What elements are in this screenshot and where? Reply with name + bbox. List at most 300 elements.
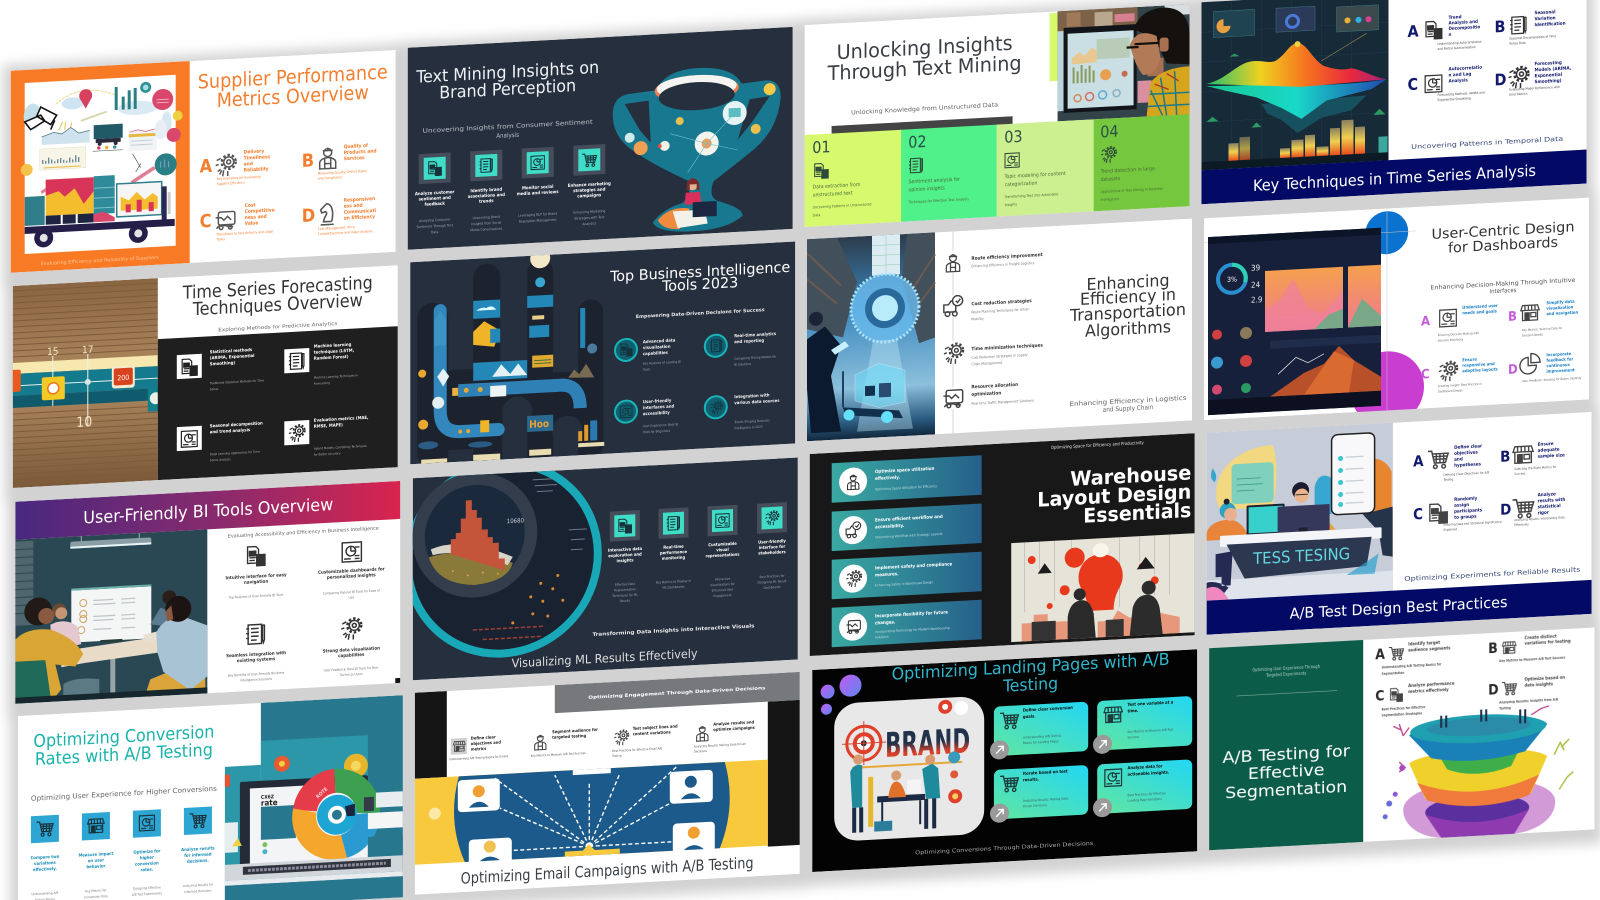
design items A B C D [1421, 298, 1582, 395]
column headings [414, 182, 610, 206]
design items A B C D: feedback for [1546, 356, 1573, 363]
panel: Visualizing ML Results Effectively slide [408, 448, 798, 681]
title: Algorithms [1085, 317, 1171, 341]
title: Warehouse [1070, 460, 1191, 491]
practices A B C D: C [1413, 505, 1423, 524]
practices A B C D: B [1500, 447, 1510, 466]
column headings: Enhance marketing [568, 181, 611, 189]
step boxes 01 to 04 [805, 114, 1190, 227]
techniques A B C D: Models (ARIMA, [1534, 65, 1572, 73]
feature text: Tools for Beginners [643, 429, 671, 434]
orange sidebar [11, 61, 190, 273]
column headings: monitoring [662, 555, 685, 561]
segmentation items A B C D: Best Practices for Effective [1382, 705, 1425, 711]
purple dots [821, 674, 862, 715]
techniques A B C D: Seasonal [1534, 9, 1556, 16]
column headings: strategies and [573, 187, 606, 194]
step boxes 01 to 04: Applications of Text Mining in Business [1101, 187, 1163, 194]
illustration: rainbow time series chart [1202, 0, 1388, 170]
tool features: Comparing Popular BI Tools for Ease of [323, 588, 381, 596]
icons [216, 147, 338, 231]
practices A B C D: to groups [1454, 514, 1477, 521]
illustration: testers at desk with phone [1207, 423, 1393, 601]
title: for Dashboards [1448, 235, 1558, 257]
metrics A B C D: A [200, 156, 213, 177]
title: Rates with A/B Testing [35, 740, 213, 770]
feature text: Key Features of Leading BI [643, 360, 681, 366]
design items A B C D: adaptive layouts [1462, 366, 1498, 373]
title: Visualizing ML Results Effectively [512, 646, 698, 670]
practices A B C D: Randomly [1454, 496, 1478, 503]
panel: Optimizing Landing Pages with A/B Testing slide [812, 648, 1197, 872]
sidebar caption: Targeted Experiments [1265, 671, 1306, 678]
column descriptions: Interactive [715, 577, 730, 581]
list cards: Solutions [875, 635, 889, 639]
panel: A/B Test Design Best Practices slide [1207, 412, 1592, 635]
title [198, 68, 387, 107]
techniques A B C D: Exponential [1534, 72, 1563, 79]
feature text: BI Solutions [734, 362, 752, 367]
step descriptions: A/B Test Experiments [132, 891, 163, 897]
feature text: and reporting [734, 338, 764, 345]
step descriptions: Designing Effective [133, 885, 161, 891]
column descriptions: Visualizations for [710, 582, 736, 587]
title: Optimizing Email Campaigns with A/B Testing [461, 854, 754, 888]
column descriptions [612, 574, 787, 604]
tool features: Customizable dashboards for [318, 566, 385, 576]
title [33, 722, 214, 770]
feature text [643, 331, 780, 435]
practices A B C D: Selecting the Right Metrics for [1514, 465, 1557, 471]
design items A B C D: Ensure [1462, 357, 1477, 362]
title: A/B Test Design Best Practices [1290, 594, 1508, 623]
segmentation items A B C D: Optimize based on [1524, 675, 1565, 683]
title [1037, 460, 1191, 530]
techniques A B C D: Identification [1534, 21, 1566, 28]
list cards: Streamlining Workflow with Strategic Layouts [875, 532, 943, 539]
step descriptions: Informed Decisions [184, 889, 212, 894]
tool features: Technical Users [340, 672, 363, 677]
techniques A B C D: A [1408, 22, 1419, 41]
panel: User-Centric Design for Dashboards slide [1204, 198, 1589, 435]
title: Effective [1248, 760, 1325, 783]
practices A B C D: A [1413, 452, 1424, 471]
column descriptions: Leveraging NLP for Brand [518, 212, 557, 218]
title [892, 650, 1170, 702]
title: Efficiency in [1080, 285, 1176, 309]
feature cards: Driven Decisions [1023, 803, 1047, 808]
panel: Text Mining Insights on Brand Perception slide [408, 27, 793, 250]
design items A B C D: Ensuring Decision-Making with [1438, 331, 1480, 337]
practices A B C D: Analyze [1538, 491, 1556, 498]
feature cards: Basics for Landing Pages [1023, 739, 1059, 745]
tool features: Seamless integration with [226, 650, 286, 659]
design items A B C D: needs and goals [1462, 308, 1498, 315]
design items A B C D: B [1508, 309, 1517, 325]
illustration: dashboard screen: 3% [1227, 276, 1237, 284]
tool features: personalized insights [327, 572, 376, 581]
illustration: dashboard screen: 2.9 [1251, 295, 1263, 305]
step boxes 01 to 04: 02 [908, 132, 926, 152]
steps list: Cost reduction strategies [971, 298, 1032, 307]
techniques A B C D: Evaluating Model Performance with [1509, 85, 1560, 92]
metrics A B C D: Competitiveness and Value Analysis [318, 229, 373, 236]
metrics A B C D: Quality of [344, 143, 368, 150]
four steps: Decisions [694, 749, 707, 754]
title [1222, 741, 1350, 803]
list cards: Optimize space utilization [875, 466, 934, 475]
illustration: dashboard screen [1208, 228, 1381, 415]
techniques A B C D: C [1408, 75, 1418, 94]
illustration: BRAND card: BRAND [885, 721, 970, 766]
subtitle: and Supply Chain [1103, 403, 1154, 414]
step headings [30, 845, 215, 879]
title: Segmentation [1225, 777, 1347, 802]
illustration: BRAND card [834, 696, 984, 842]
dark panel with four methods: techniques (LSTM, [314, 348, 355, 356]
step boxes 01 to 04: 03 [1004, 127, 1022, 147]
column descriptions: Analyzing Consumer [419, 217, 451, 223]
step boxes 01 to 04: datasets [1101, 176, 1121, 183]
title: Time Series Forecasting [182, 273, 373, 304]
design items A B C D: Key Metrics: Tailoring Data for [1522, 326, 1563, 332]
design items A B C D: and navigation [1546, 310, 1578, 316]
dark panel with four methods: Statistical methods [210, 347, 253, 355]
list cards [832, 455, 982, 647]
four steps: Test subject lines and [633, 723, 678, 731]
step headings: decisions. [187, 858, 209, 865]
icons [943, 250, 963, 410]
step boxes 01 to 04: Techniques for Effective Text Analysis [909, 197, 969, 204]
photo: analyst at monitor [1058, 4, 1190, 121]
column descriptions: Results [620, 599, 631, 603]
dark panel with four methods: Smoothing) [210, 360, 235, 367]
metrics A B C D: Cost [245, 202, 256, 209]
tool features: Intuitive interface for easy [226, 572, 287, 581]
column descriptions: ML Dashboards [662, 585, 685, 590]
metrics A B C D: Services [344, 155, 365, 162]
metrics A B C D: Timeliness [244, 154, 271, 162]
practices A B C D: and [1454, 456, 1463, 463]
metrics A B C D: Measuring Quality: Defect Rates [318, 169, 367, 176]
segmentation items A B C D: Identify target [1408, 640, 1440, 648]
column descriptions [416, 209, 605, 235]
feature cards: Key Metrics to Measure A/B Test [1128, 727, 1174, 734]
column headings: User-friendly [758, 538, 786, 545]
title: Techniques Overview [192, 290, 363, 320]
feature text: User Experience: Best BI [643, 422, 678, 428]
step headings: on user [88, 857, 104, 864]
segmentation items A B C D: Testing [1499, 706, 1511, 711]
step boxes 01 to 04: 04 [1100, 122, 1118, 142]
panel: Warehouse Layout Design Essentials slide [810, 433, 1195, 656]
subtitle: Uncovering Insights from Consumer Sentiment [423, 119, 594, 135]
segmentation items A B C D: Analyzing Results: Insights from A/B [1499, 697, 1558, 705]
title: Tools 2023 [661, 275, 738, 295]
column headings: Monitor social [522, 184, 554, 192]
techniques A B C D [1408, 8, 1572, 104]
panel: A/B Testing for Effective Segmentation slide [1209, 628, 1594, 850]
title: User-Centric Design [1432, 219, 1575, 243]
feature text: Advanced data [643, 337, 676, 345]
feature cards: Landing Page Variations [1128, 797, 1162, 803]
dark panel with four methods: for Better Accuracy [314, 451, 341, 457]
step headings: for informed [184, 852, 212, 859]
icons [246, 541, 361, 645]
column headings: representations [706, 552, 740, 558]
illustration: wooden timeline: 15 [47, 347, 59, 358]
illustration: wooden timeline: 200 [117, 374, 129, 382]
step boxes 01 to 04: Sentiment analysis for [909, 177, 960, 185]
illustration: wooden timeline: 17 [82, 345, 94, 356]
column descriptions: Enhancing Marketing [573, 209, 605, 215]
column headings: Interactive data [608, 546, 642, 553]
panel: Optimizing Conversion Rates with A/B Testing slide [18, 695, 403, 900]
metrics A B C D: Supplier Efficiency [217, 181, 245, 186]
illustration: data pipeline hand: Hoo [529, 419, 549, 431]
feature text: interfaces and [643, 404, 675, 411]
steps list: Route efficiency improvement [971, 252, 1043, 262]
metrics A B C D: Reliability [244, 166, 269, 174]
four steps: Key Metrics to Measure A/B Test Success [531, 751, 586, 758]
grey banner [555, 672, 800, 713]
feature cards: Understanding A/B Testing [1023, 734, 1061, 740]
list cards: Optimizing Space Utilization for Efficiency [875, 484, 937, 491]
column descriptions: Strategies with Text [574, 215, 605, 221]
tool features [226, 566, 385, 683]
tool features: navigation [244, 579, 268, 586]
step descriptions: Key Metrics for [85, 888, 107, 893]
column descriptions: Media Conversations [470, 227, 503, 232]
column headings: campaigns [577, 192, 602, 200]
list cards: Enhancing Safety in Warehouse Design [875, 580, 933, 587]
techniques A B C D: Analysis and [1448, 19, 1478, 26]
segmentation items A B C D: variations for testing [1524, 638, 1571, 647]
feature cards: actionable insights. [1128, 769, 1170, 777]
design items A B C D: Understand user [1462, 303, 1498, 310]
four steps: Analyzing Results: Making Data-Driven [694, 742, 746, 749]
techniques A B C D: Analysis [1448, 77, 1468, 84]
feature cards: Test one variable at a [1128, 699, 1174, 707]
illustration: dashboard screen: 39 [1251, 263, 1261, 273]
steps list [971, 252, 1043, 406]
feature text: Real-time analytics [734, 331, 777, 339]
practices A B C D: statistical [1538, 503, 1561, 510]
feature text: Trends Shaping Business [734, 418, 770, 424]
title: Testing [1002, 674, 1058, 696]
step descriptions: Analyzing Results for [183, 882, 214, 888]
techniques A B C D: B [1495, 17, 1505, 36]
practices A B C D: rigor [1538, 510, 1550, 516]
design items A B C D: improvement [1546, 367, 1575, 374]
subtitle: Empowering Data-Driven Decisions for Success [636, 307, 765, 320]
metrics A B C D: Key Indicators for Evaluating [217, 175, 261, 181]
illustration: trophy with woman at laptop [613, 64, 781, 236]
icon row [610, 502, 787, 542]
title: Transportation [1069, 300, 1186, 325]
title: Optimizing Landing Pages with A/B [892, 650, 1170, 684]
illustration: wooden timeline [9, 278, 162, 488]
subtitle: Optimizing User Experience for Higher Conversions [31, 785, 217, 803]
subtitle [1070, 394, 1186, 416]
design items A B C D: visualization [1546, 304, 1574, 311]
illustration: supplier truck with charts [21, 74, 183, 254]
title: Optimizing Conversion [33, 722, 214, 752]
tool features: Use [349, 595, 354, 600]
column descriptions: Engagement [713, 593, 733, 598]
practices A B C D: Define clear [1454, 443, 1483, 451]
metrics A B C D: Products and [344, 148, 377, 156]
subtitle: Enhancing Decision-Making Through Intuitive [1431, 277, 1576, 292]
photo: glowing warehouse with worker and forklift [807, 232, 935, 441]
step headings: Optimize for [133, 848, 160, 856]
title [182, 276, 372, 316]
column descriptions: Insights from Social [471, 221, 501, 226]
column headings: feedback [425, 201, 445, 208]
title [1432, 219, 1574, 258]
techniques A B C D: Trend [1448, 14, 1462, 21]
subtitle: Evaluating Accessibility and Efficiency in Business Intelligence [228, 526, 379, 540]
metrics A B C D: D [302, 205, 315, 227]
feature cards [990, 696, 1192, 823]
column headings: Identify brand [470, 187, 502, 194]
dark panel with four methods: Seasonal decomposition [210, 420, 263, 429]
step headings: rates. [141, 867, 154, 873]
steps list: Resource allocation [971, 382, 1018, 390]
icon row [419, 144, 605, 184]
column headings: media and reviews [517, 189, 559, 197]
techniques A B C D: Smoothing) [1534, 78, 1562, 85]
dark panel with four methods: Series [210, 387, 219, 391]
techniques A B C D: Exponential Smoothing [1438, 96, 1471, 102]
column descriptions: Enhanced User [712, 587, 734, 593]
design items A B C D: Decision Needs [1522, 332, 1543, 338]
column headings: visual [716, 547, 729, 552]
metrics A B C D: and Compliance [318, 175, 342, 181]
segmentation items A B C D: Key Metrics to Measure A/B Test Success [1499, 656, 1565, 663]
techniques A B C D: Understanding Autocorrelation [1438, 40, 1482, 46]
design items A B C D: responsive and [1462, 361, 1495, 368]
feature cards: goals. [1023, 713, 1036, 719]
techniques A B C D: Forecasting [1534, 60, 1562, 67]
tool features: existing systems [237, 656, 276, 664]
green sidebar [1209, 640, 1363, 850]
techniques A B C D: and Partial Autocorrelation [1438, 45, 1476, 51]
illustration: laptop with donut chart: ROTE [315, 786, 329, 800]
feature text: capabilities [643, 350, 669, 357]
list cards: changes. [875, 619, 896, 626]
steps list: Mobility [971, 317, 984, 321]
dark panel with four methods: Hybrid Models: Combining Techniques [314, 444, 367, 451]
feature text: visualization [643, 344, 671, 351]
panel: User-Friendly BI Tools Overview slide [15, 481, 400, 704]
segmentation items A B C D: C [1375, 688, 1384, 705]
four steps: targeted testing [552, 733, 587, 740]
four steps: content variations [633, 729, 672, 736]
practices A B C D: results with [1538, 497, 1565, 504]
four steps: Best Practices for Effective Email A/B [612, 746, 662, 753]
design items A B C D: Intuitive Interfaces [1438, 337, 1464, 343]
design items A B C D: A [1421, 314, 1430, 330]
subtitle: Optimizing Space for Efficiency and Productivity [1051, 440, 1145, 451]
panel: Enhancing Efficiency in Transportation Algorithms slide [807, 219, 1192, 441]
illustration: dashboard screen: 24 [1251, 280, 1261, 290]
step headings: variations [34, 860, 57, 867]
segmentation items A B C D: Segmentation Strategies [1382, 711, 1422, 717]
sidebar caption: Optimizing User Experience Through [1252, 664, 1321, 672]
subtitle [423, 120, 593, 138]
practices A B C D [1413, 439, 1565, 534]
column headings: trends [479, 198, 494, 205]
feature text: various data sources [734, 398, 780, 406]
dark panel with four methods [158, 326, 398, 480]
title: Unlocking Insights [837, 31, 1013, 64]
steps list: optimization [971, 390, 1001, 398]
metrics A B C D: B [302, 150, 314, 172]
steps list: Route Planning Techniques for Urban [971, 307, 1029, 314]
techniques A B C D: D [1495, 70, 1506, 89]
column headings: Customizable [708, 541, 737, 547]
step headings: effectively. [33, 866, 57, 873]
column descriptions: Sentiment Through Text [416, 223, 454, 229]
photo: team meeting at whiteboard [15, 529, 207, 704]
panel: Top Business Intelligence Tools 2023 slide [410, 235, 795, 464]
four steps: Segment audience for [552, 727, 598, 734]
illustration: layered funnel [1383, 705, 1573, 841]
segmentation items A B C D: Analyze performance [1408, 681, 1455, 689]
practices A B C D: assign [1454, 502, 1469, 509]
column descriptions: Designing ML Result [757, 579, 787, 585]
step boxes 01 to 04: Transforming Text into Actionable [1005, 192, 1058, 199]
column descriptions: Key Metrics to Display in [656, 579, 691, 585]
illustration: red bulb with silhouettes [1011, 533, 1195, 642]
four steps: objectives and [471, 740, 501, 746]
dark panel with four methods: Traditional Statistical Methods for Time [210, 378, 264, 385]
design items A B C D: continuous [1546, 362, 1571, 368]
list cards: Incorporating Technology for Modern Warehousing [875, 626, 950, 634]
four steps: Define clear [471, 734, 496, 741]
step boxes 01 to 04: Data [813, 213, 820, 218]
step descriptions: Understanding A/B [31, 891, 58, 896]
illustration: audience rays from folder [415, 760, 768, 873]
panel: Key Techniques in Time Series Analysis slide [1202, 0, 1586, 204]
metrics A B C D: on Efficiency [344, 214, 375, 222]
dark panel with four methods: Random Forest) [314, 354, 349, 362]
step boxes 01 to 04: Uncovering Patterns in Unstructured [813, 202, 871, 210]
metrics A B C D: Transitions to Fast delivery and Legal [217, 230, 273, 237]
column headings: exploration and [608, 551, 642, 558]
dark panel with four methods: and trend analysis [210, 427, 251, 435]
dark panel with four methods: Series Analysis [210, 457, 231, 462]
step boxes 01 to 04: Intelligence [1101, 197, 1119, 202]
title: Supplier Performance [198, 60, 388, 94]
list cards: Incorporate flexibility for future [875, 610, 948, 619]
feature cards: Best Practices for Effective [1128, 791, 1166, 797]
step headings: Analyze results [181, 845, 215, 853]
metrics A B C D: C [200, 211, 212, 232]
column descriptions: Uncovering Brand [473, 215, 500, 220]
subtitle: Optimizing Experiments for Reliable Results [1404, 566, 1580, 583]
step descriptions: Conversion Rate [84, 894, 108, 899]
dark panel with four methods: (ARIMA, Exponential [210, 353, 254, 361]
illustration: laptop with donut chart: CX6Z [261, 794, 275, 801]
step boxes 01 to 04: unstructured text [813, 190, 853, 199]
metrics A B C D: Communicati [344, 208, 377, 216]
panel: Supplier Performance Metrics Overview slide [11, 50, 396, 273]
techniques A B C D: Error Metrics [1509, 92, 1528, 97]
dark panel with four methods: Deep Learning Approaches for Time [210, 450, 260, 456]
design items A B C D: Dashboard Design [1438, 388, 1463, 394]
